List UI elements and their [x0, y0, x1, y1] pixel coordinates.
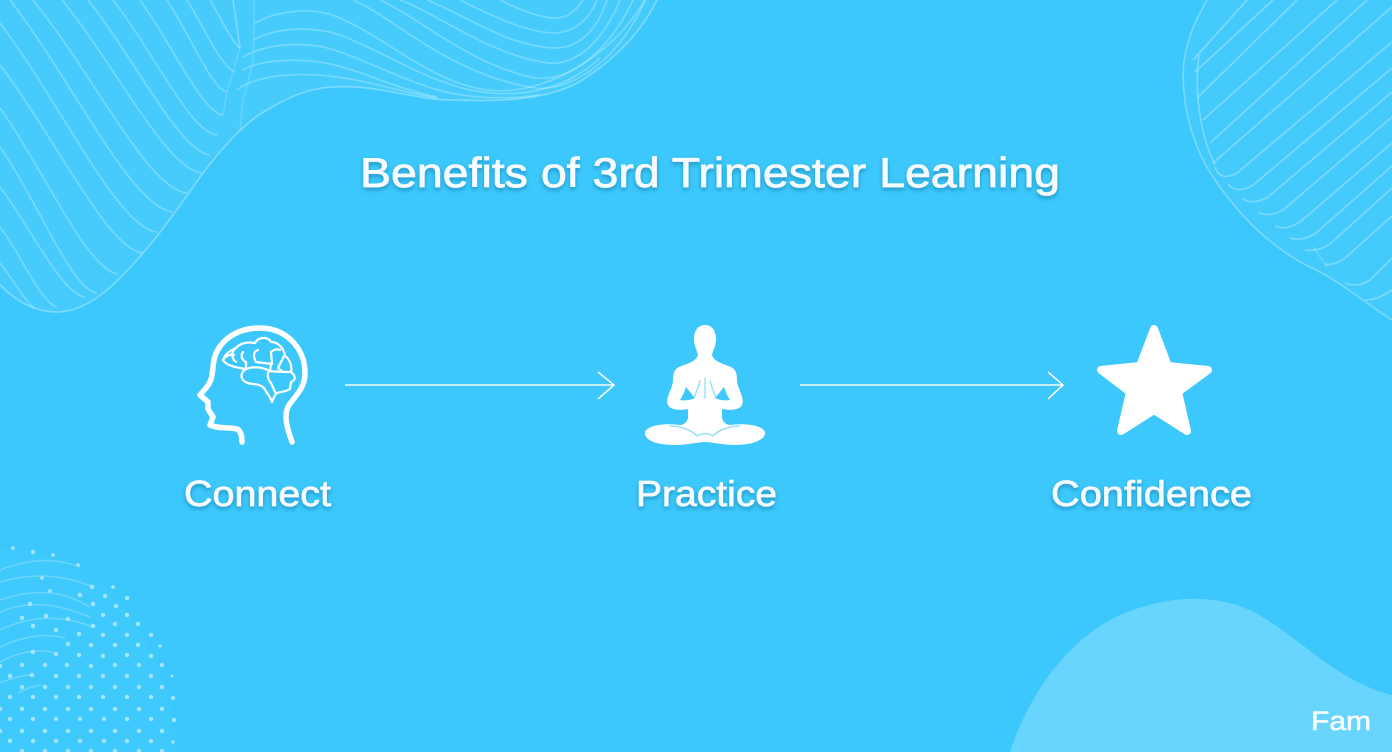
- step: Confidence: [1051, 329, 1252, 514]
- logo: Fam: [1311, 706, 1371, 736]
- decoration: bottom-left dots and arcs: [0, 546, 176, 752]
- step: Connect: [184, 328, 331, 514]
- title: Benefits of 3rd Trimester Learning: [360, 149, 1060, 196]
- icon: head with brain: [200, 328, 305, 442]
- decoration: top-left wave lines: [0, 0, 657, 312]
- label: Connect: [184, 473, 331, 514]
- arrow: connect to practice: [345, 372, 614, 399]
- step: Practice: [636, 325, 777, 514]
- decoration: bottom-right blob: [1010, 599, 1392, 752]
- icon: meditating figure: [645, 325, 765, 445]
- label: Confidence: [1051, 473, 1252, 514]
- label: Practice: [636, 473, 777, 514]
- decoration: top-right contour lines: [1183, 0, 1392, 320]
- icon: star: [1101, 329, 1208, 431]
- arrow: practice to confidence: [800, 372, 1063, 399]
